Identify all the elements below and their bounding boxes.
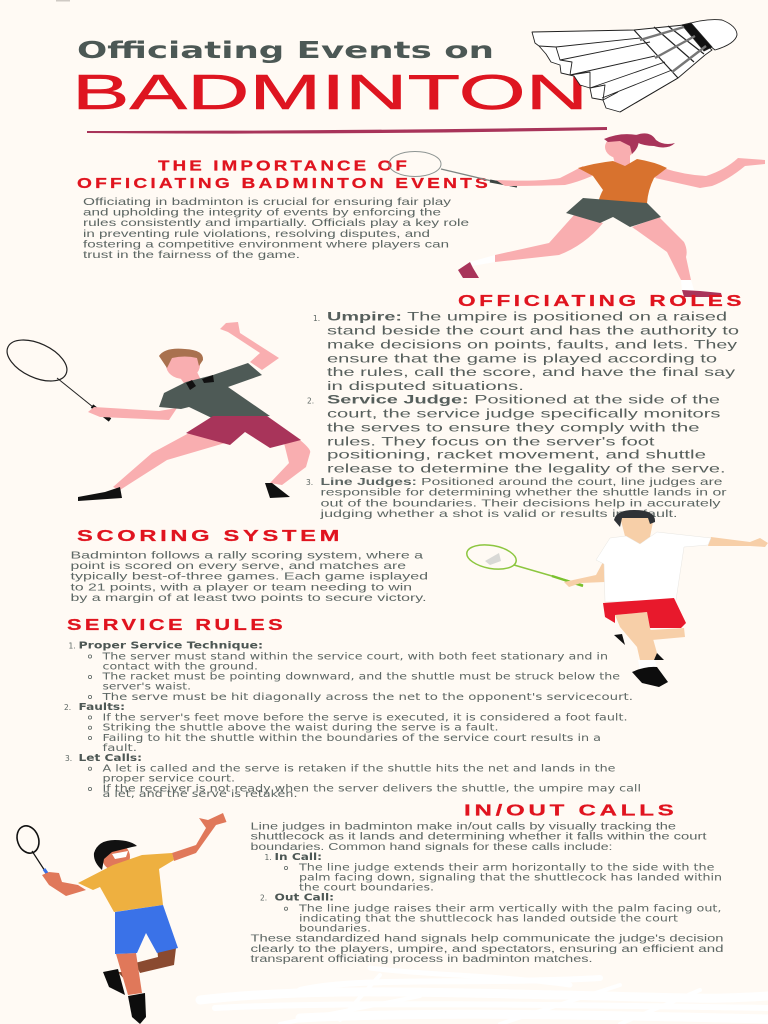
list: let calls bbox=[65, 753, 641, 800]
list: faults: Striking the shuttle above the waist during the serve is a fault. bbox=[102, 722, 498, 733]
panel: in/out calls bbox=[250, 802, 724, 965]
text block: scoring paragraph: to 21 points, with a player or team needing to win bbox=[70, 582, 412, 593]
illustration: woman player in orange shirt bbox=[389, 133, 765, 297]
illustration: man player in grey shirt bbox=[1, 322, 310, 501]
panel: scoring system bbox=[70, 528, 428, 604]
list: in call: palm facing down, signaling that the shuttlecock has landed within bbox=[299, 872, 722, 883]
title line: Officiating Events on: Officiating Events on bbox=[77, 38, 494, 64]
illustration: jumping player in yellow shirt bbox=[13, 813, 227, 1024]
list: let calls: A let is called and the serve is retaken if the shuttle hits the net and lands in the bbox=[102, 763, 616, 774]
list item: line judges bbox=[306, 477, 727, 520]
decoration: white brush scribble bbox=[200, 968, 768, 1024]
heading: in/out calls: IN/OUT CALLS bbox=[464, 802, 678, 820]
list item: service judge: Service Judge: Positioned at the side of the bbox=[327, 392, 720, 406]
list: out call: indicating that the shuttlecock has landed outside the court bbox=[299, 913, 678, 924]
list: in call: the court boundaries. bbox=[299, 882, 434, 893]
text block: in/out conclusion: clearly to the players, umpire, and spectators, ensuring an efficient and bbox=[250, 944, 724, 955]
list: let calls: proper service court. bbox=[102, 774, 235, 785]
list: out call: 2. bbox=[260, 894, 267, 903]
list: let calls: If the receiver is not ready when the server delivers the shuttle, the umpire may call bbox=[102, 784, 641, 795]
list item: line judges: responsible for determining whether the shuttle lands in or bbox=[320, 488, 727, 499]
text block: scoring paragraph: point is scored on every serve, and matches are bbox=[70, 561, 406, 572]
text block: importance paragraph: in preventing rule violations, resolving disputes, and bbox=[83, 229, 430, 240]
list item: umpire: in disputed situations. bbox=[327, 379, 524, 393]
illustration: man player in white shirt with green racket bbox=[465, 510, 768, 687]
list: let calls: Let Calls: bbox=[78, 753, 142, 764]
heading: officiating roles: OFFICIATING ROLES bbox=[458, 293, 745, 310]
text block: importance paragraph bbox=[83, 197, 469, 261]
list item: umpire: the rules, call the score, and have the final say bbox=[327, 365, 736, 379]
list item: line judges: Line Judges: Positioned around the court, line judges are bbox=[320, 477, 723, 488]
list item: umpire: make decisions on points, faults, and lets. They bbox=[327, 337, 738, 351]
heading: the importance of officiating: OFFICIATING BADMINTON EVENTS bbox=[77, 175, 491, 192]
heading: the importance of officiating bbox=[77, 158, 491, 192]
list: in call: The line judge extends their arm horizontally to the side with the bbox=[298, 862, 714, 873]
list: proper service technique: The serve must be hit diagonally across the net to the opponent's servicecourt. bbox=[101, 692, 633, 703]
text block: scoring paragraph: by a margin of at least two points to secure victory. bbox=[70, 593, 426, 604]
list: faults bbox=[64, 702, 628, 754]
list: in call bbox=[264, 852, 722, 893]
list item: umpire: 1. bbox=[313, 314, 320, 323]
panel: service rules bbox=[64, 617, 641, 800]
list: proper service technique: Proper Service Technique: bbox=[78, 640, 263, 651]
list: in call: 1. bbox=[264, 853, 272, 862]
list item: service judge bbox=[307, 392, 726, 476]
title bbox=[72, 38, 588, 120]
text block: in/out intro: boundaries. Common hand signals for these calls include: bbox=[250, 842, 612, 853]
heading: scoring system: SCORING SYSTEM bbox=[77, 528, 343, 545]
list: out call: boundaries. bbox=[299, 923, 371, 934]
list item: service judge: positioning, racket movement, and shuttle bbox=[327, 448, 706, 462]
list item: service judge: rules. They focus on the server's foot bbox=[327, 434, 655, 448]
list: faults: fault. bbox=[102, 743, 137, 754]
list item: line judges: out of the boundaries. Their decisions help in accurately bbox=[320, 498, 722, 509]
divider line bbox=[87, 127, 607, 134]
list: proper service technique: The server must stand within the service court, with both feet stationary and in bbox=[101, 651, 608, 662]
list item: umpire: stand beside the court and has the authority to bbox=[327, 324, 739, 338]
list: faults: If the server's feet move before the serve is executed, it is considered a foot fault. bbox=[102, 712, 628, 723]
list item: umpire: Umpire: The umpire is positioned on a raised bbox=[327, 310, 727, 324]
list: faults: 2. bbox=[64, 703, 71, 712]
text block: scoring paragraph bbox=[70, 550, 428, 604]
list: let calls: 3. bbox=[65, 754, 72, 763]
list: proper service technique bbox=[68, 640, 633, 703]
text block: importance paragraph: rules consistently and impartially. Officials play a key role bbox=[83, 218, 469, 229]
list: out call: Out Call: bbox=[274, 893, 334, 904]
panel: officiating roles bbox=[306, 293, 745, 520]
text block: importance paragraph: and upholding the integrity of events by enforcing the bbox=[83, 208, 441, 218]
list item: umpire: ensure that the game is played according to bbox=[327, 351, 717, 365]
list: proper service technique: contact with the ground. bbox=[102, 661, 258, 672]
text block: scoring paragraph: Badminton follows a rally scoring system, where a bbox=[70, 550, 423, 561]
text block: importance paragraph: trust in the fairness of the game. bbox=[83, 250, 300, 261]
heading: service rules: SERVICE RULES bbox=[67, 617, 286, 634]
list: faults: Faults: bbox=[78, 702, 125, 713]
list: out call: The line judge raises their arm vertically with the palm facing out, bbox=[298, 903, 722, 914]
text block: scoring paragraph: typically best-of-three games. Each game isplayed bbox=[70, 572, 428, 583]
text block: importance paragraph: Officiating in badminton is crucial for ensuring fair play bbox=[83, 197, 452, 208]
text block: importance paragraph: fostering a competitive environment where players can bbox=[83, 240, 449, 250]
list item: service judge: court, the service judge specifically monitors bbox=[327, 406, 720, 420]
list item: service judge: release to determine the legality of the serve. bbox=[327, 462, 726, 476]
title line: BADMINTON: BADMINTON bbox=[72, 66, 588, 120]
text block: in/out conclusion: These standardized hand signals help communicate the judge's decision bbox=[250, 934, 724, 945]
list item: line judges: judging whether a shot is valid or results in a fault. bbox=[319, 509, 678, 520]
text block: in/out intro: shuttlecock as it lands and determining whether it falls within the court bbox=[250, 832, 707, 843]
list: proper service technique: The racket must be pointing downward, and the shuttle must be struck below the bbox=[101, 672, 620, 683]
list item: service judge: the serves to ensure they comply with the bbox=[327, 420, 700, 434]
list item: umpire bbox=[313, 310, 739, 393]
list: faults: Failing to hit the shuttle within the boundaries of the service court results in a bbox=[102, 733, 601, 744]
list item: service judge: 2. bbox=[307, 396, 314, 406]
list: out call bbox=[260, 893, 722, 934]
text block: in/out conclusion: transparent officiating process in badminton matches. bbox=[250, 954, 592, 965]
list item: line judges: 3. bbox=[306, 478, 313, 487]
icon: shuttle in racket bbox=[485, 553, 501, 565]
text block: in/out intro bbox=[250, 822, 707, 853]
panel: importance of officiating bbox=[77, 158, 491, 261]
list: in call: In Call: bbox=[274, 852, 322, 863]
list: proper service technique: server's waist. bbox=[102, 682, 191, 693]
text block: in/out intro: Line judges in badminton make in/out calls by visually tracking the bbox=[250, 822, 677, 833]
text block: in/out conclusion bbox=[250, 934, 724, 965]
heading: the importance of officiating: THE IMPORTANCE OF bbox=[158, 158, 410, 174]
list: proper service technique: 1. bbox=[68, 642, 76, 650]
list: let calls: a let, and the serve is retaken. bbox=[102, 789, 298, 800]
icon: shuttlecock bbox=[532, 20, 737, 112]
